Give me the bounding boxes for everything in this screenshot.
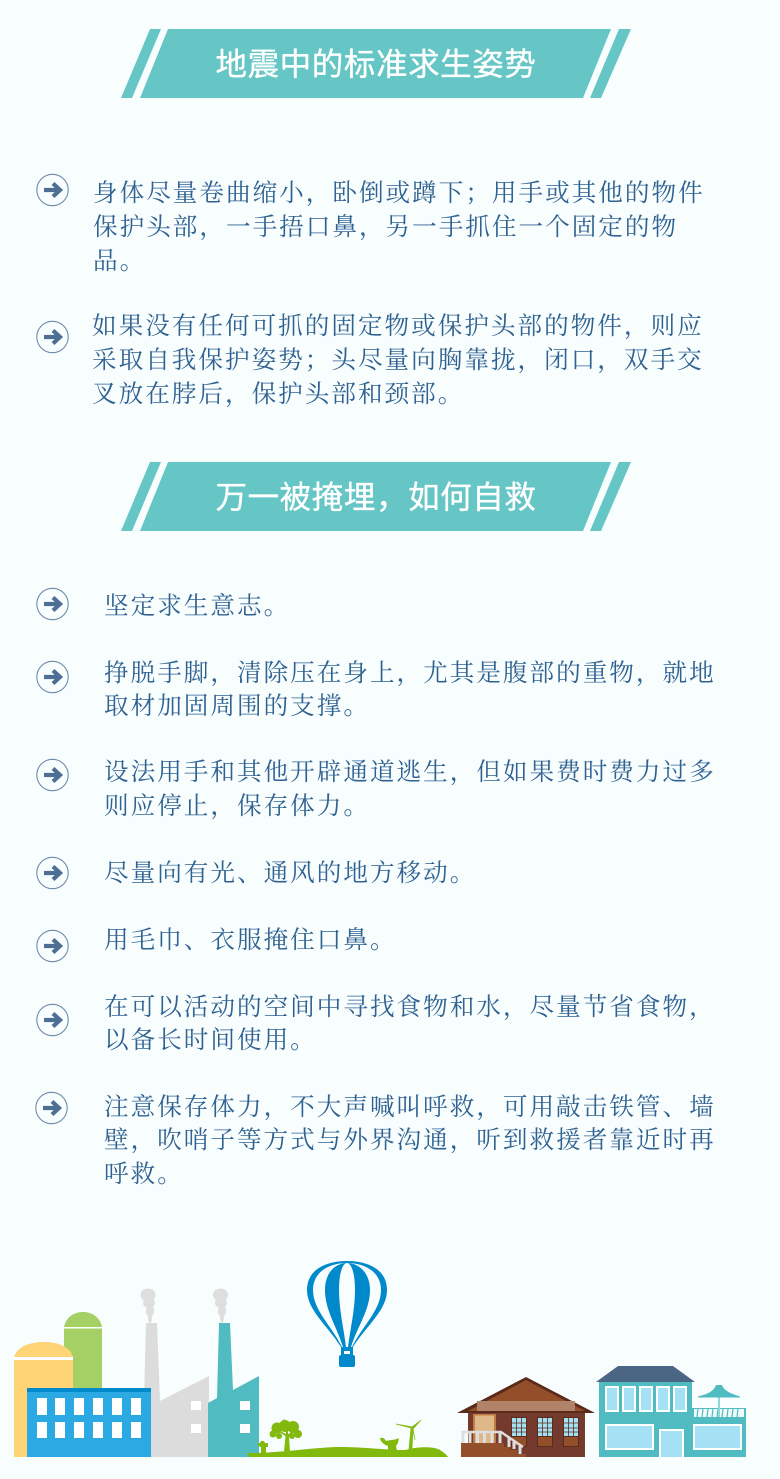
icon: arrow bullet 8: [36, 1004, 69, 1036]
text block: self-protection posture: [92, 307, 704, 410]
icon: hot air balloon: [307, 1261, 387, 1367]
text block: find food and water: 以备长时间使用。: [104, 1021, 317, 1056]
text block: stay determined: 坚定求生意志。: [104, 587, 290, 622]
icon: arrow bullet 1: [36, 174, 69, 206]
text block: curl up and protect head: [93, 174, 705, 277]
text block: free limbs and clear weight: 取材加固周围的支撑。: [104, 687, 370, 722]
icon: arrow bullet 2: [36, 320, 69, 354]
heading: if buried, how to save yourself: [121, 462, 631, 531]
text block: conserve strength and signal: [104, 1088, 716, 1190]
icon: arrow bullet 7: [36, 930, 69, 962]
heading: standard survival posture: 地震中的标准求生姿势: [215, 46, 536, 82]
icon: teal factory: [208, 1288, 259, 1457]
icon: teal house: [596, 1366, 746, 1458]
text block: move toward light and air: 尽量向有光、通风的地方移动。: [104, 854, 476, 889]
icon: green silo: [64, 1312, 102, 1392]
text block: open an escape passage: 设法用手和其他开辟通道逃生，但如果费时费力过多: [104, 753, 716, 788]
icon: arrow bullet 3: [36, 588, 69, 620]
heading: if buried, how to save yourself: 万一被掩埋，如何自救: [215, 479, 536, 515]
text block: conserve strength and signal: 壁，吹哨子等方式与外界沟通，听到救援者靠近时再: [104, 1121, 716, 1156]
text block: self-protection posture: 采取自我保护姿势；头尽量向胸靠拢，闭口，双手交: [92, 341, 704, 376]
icon: brown house: [457, 1377, 595, 1457]
icon: arrow bullet 9: [35, 1092, 68, 1124]
heading: standard survival posture: [121, 29, 631, 98]
text block: find food and water: 在可以活动的空间中寻找食物和水，尽量节省食物，: [104, 988, 716, 1022]
text block: curl up and protect head: 保护头部，一手捂口鼻，另一手抓住一个固定的物: [93, 208, 678, 243]
icon: gray factory: [140, 1288, 209, 1457]
text block: conserve strength and signal: 呼救。: [104, 1155, 184, 1190]
text block: open an escape passage: [104, 753, 716, 822]
icon: arrow bullet 6: [36, 856, 69, 890]
text block: curl up and protect head: 身体尽量卷曲缩小，卧倒或蹲下；用手或其他的物件: [93, 174, 705, 209]
icon: arrow bullet 4: [36, 660, 69, 694]
text block: self-protection posture: 如果没有任何可抓的固定物或保护头部的物件，则应: [92, 307, 704, 342]
text block: curl up and protect head: 品。: [93, 242, 146, 277]
text block: cover mouth and nose: 用毛巾、衣服掩住口鼻。: [104, 921, 397, 956]
text block: free limbs and clear weight: [104, 654, 716, 722]
icon: green hill with tree and windmill: [246, 1420, 448, 1457]
icon: blue building: [27, 1388, 151, 1457]
icon: arrow bullet 5: [36, 758, 69, 792]
text block: conserve strength and signal: 注意保存体力，不大声喊叫呼救，可用敲击铁管、墙: [104, 1088, 716, 1122]
text block: find food and water: [104, 988, 716, 1056]
text block: free limbs and clear weight: 挣脱手脚，清除压在身上，尤其是腹部的重物，就地: [104, 654, 716, 688]
text block: open an escape passage: 则应停止，保存体力。: [104, 787, 370, 822]
text block: self-protection posture: 叉放在脖后，保护头部和颈部。: [92, 375, 464, 410]
icon: yellow silo: [14, 1342, 73, 1457]
